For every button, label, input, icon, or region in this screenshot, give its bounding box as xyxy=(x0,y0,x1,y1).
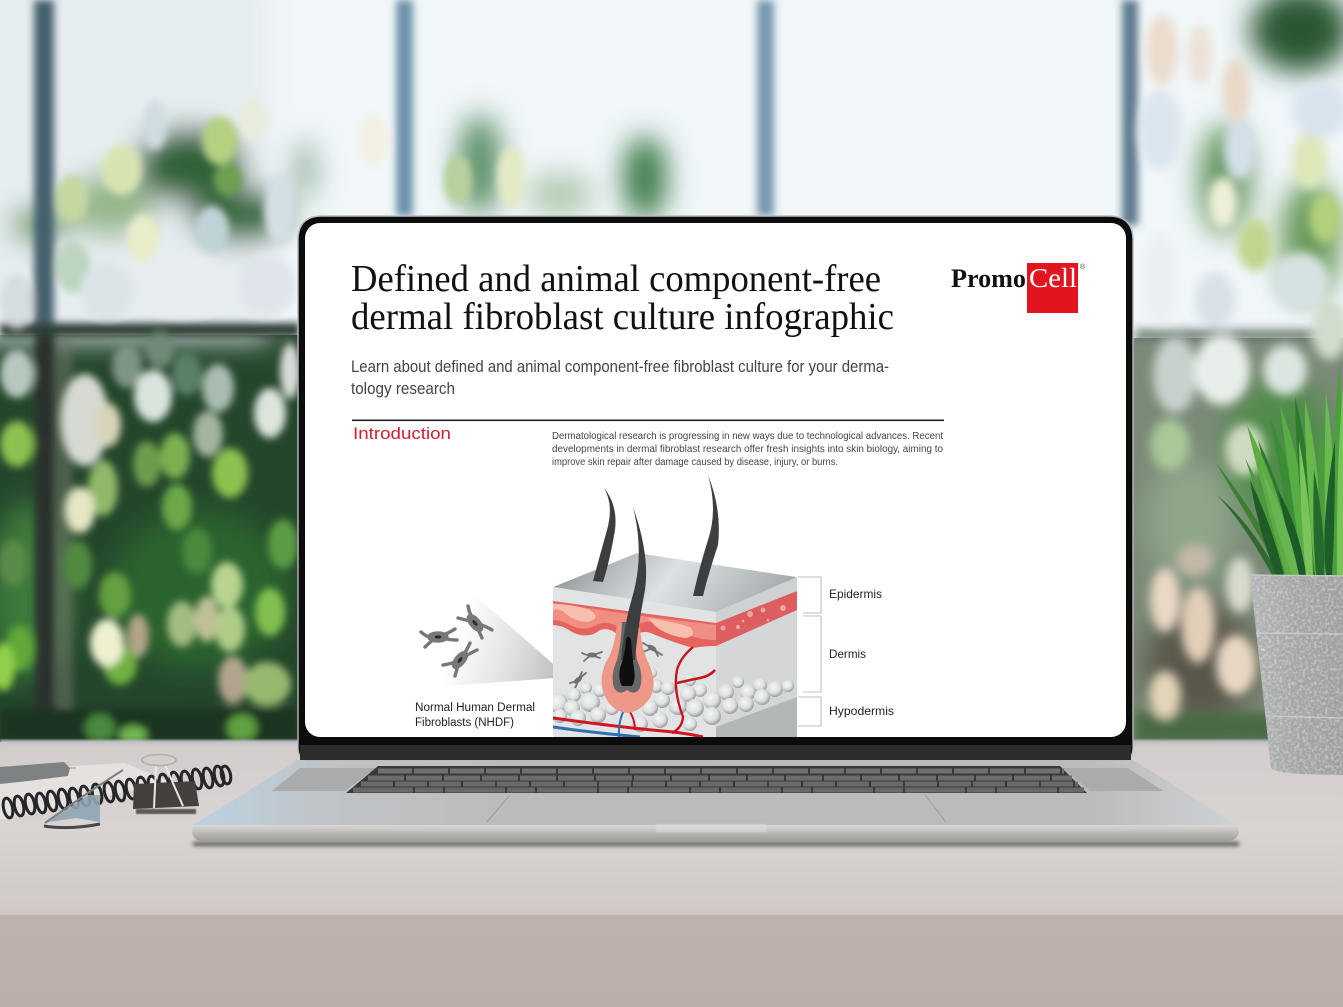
laptop front edge xyxy=(192,825,1239,842)
skin right face xyxy=(716,591,797,727)
speaker grille shading xyxy=(272,768,376,791)
screen content xyxy=(351,258,1086,738)
binder clip xyxy=(133,754,199,814)
desk surface xyxy=(0,740,1343,1007)
notebook spiral binding xyxy=(2,765,232,819)
layer labels xyxy=(829,587,894,718)
laptop base deck xyxy=(193,760,1237,825)
notebook, pen, clip and glasses on desk xyxy=(0,754,232,828)
skin cross-section xyxy=(548,553,797,738)
plant in metal pot xyxy=(1216,362,1343,775)
front notch xyxy=(656,824,766,832)
hypodermis side shade xyxy=(716,697,797,738)
top surface xyxy=(553,553,797,612)
fat globules xyxy=(548,668,794,732)
logo xyxy=(951,263,1086,313)
introduction text: developments in dermal fibroblast research offer fresh insights into skin biology, aiming to xyxy=(552,444,943,455)
screen xyxy=(305,223,1126,737)
subtitle xyxy=(351,357,889,398)
logo: Promo xyxy=(951,264,1026,293)
follicle inner xyxy=(613,622,641,693)
lower bezel xyxy=(300,745,1131,760)
layer labels: Epidermis xyxy=(829,587,882,601)
label: NHDF: Fibroblasts (NHDF) xyxy=(415,717,514,729)
blood vessels xyxy=(553,647,715,737)
subtitle: Learn about defined and animal component-free fibroblast culture for your derma- xyxy=(351,357,889,376)
pink dermis band right xyxy=(716,591,797,646)
introduction text xyxy=(552,431,943,468)
label: NHDF xyxy=(415,702,535,729)
introduction text: Dermatological research is progressing in new ways due to technological advances. Recent xyxy=(552,431,943,442)
pot body xyxy=(1250,575,1343,775)
skin left face xyxy=(553,587,716,738)
fibroblasts in dermis xyxy=(570,643,662,688)
title: dermal fibroblast culture infographic xyxy=(351,296,894,338)
hair root xyxy=(619,636,635,686)
epidermis upper band xyxy=(720,577,797,610)
pink papillae band left xyxy=(553,601,716,648)
pot rings xyxy=(1250,575,1343,718)
laptop xyxy=(192,216,1239,842)
title: Defined and animal component-free xyxy=(351,258,881,300)
follicle bulb xyxy=(602,625,654,713)
laptop lid xyxy=(298,216,1133,760)
glasses xyxy=(44,770,123,828)
layer brackets xyxy=(798,577,821,726)
grass blades xyxy=(1216,362,1343,575)
heading: introduction: Introduction xyxy=(353,424,451,443)
pot speckle xyxy=(1250,575,1343,775)
title xyxy=(351,258,894,338)
enlarged fibroblast cells xyxy=(421,606,492,676)
introduction text: improve skin repair after damage caused by disease, injury, or burns. xyxy=(552,457,838,468)
keyboard xyxy=(346,766,1087,793)
pen xyxy=(0,762,76,784)
notebook page xyxy=(0,763,170,820)
logo: Cell xyxy=(1029,263,1077,293)
blurred window background xyxy=(0,0,1343,750)
zoom callout wedge xyxy=(457,604,553,685)
hairs xyxy=(593,475,719,660)
layer labels: Dermis xyxy=(829,647,866,661)
label: NHDF: Normal Human Dermal xyxy=(415,702,535,714)
subtitle: tology research xyxy=(351,379,455,398)
logo: ® xyxy=(1080,263,1086,271)
trackpad outline xyxy=(487,795,946,822)
layer labels: Hypodermis xyxy=(829,704,894,718)
